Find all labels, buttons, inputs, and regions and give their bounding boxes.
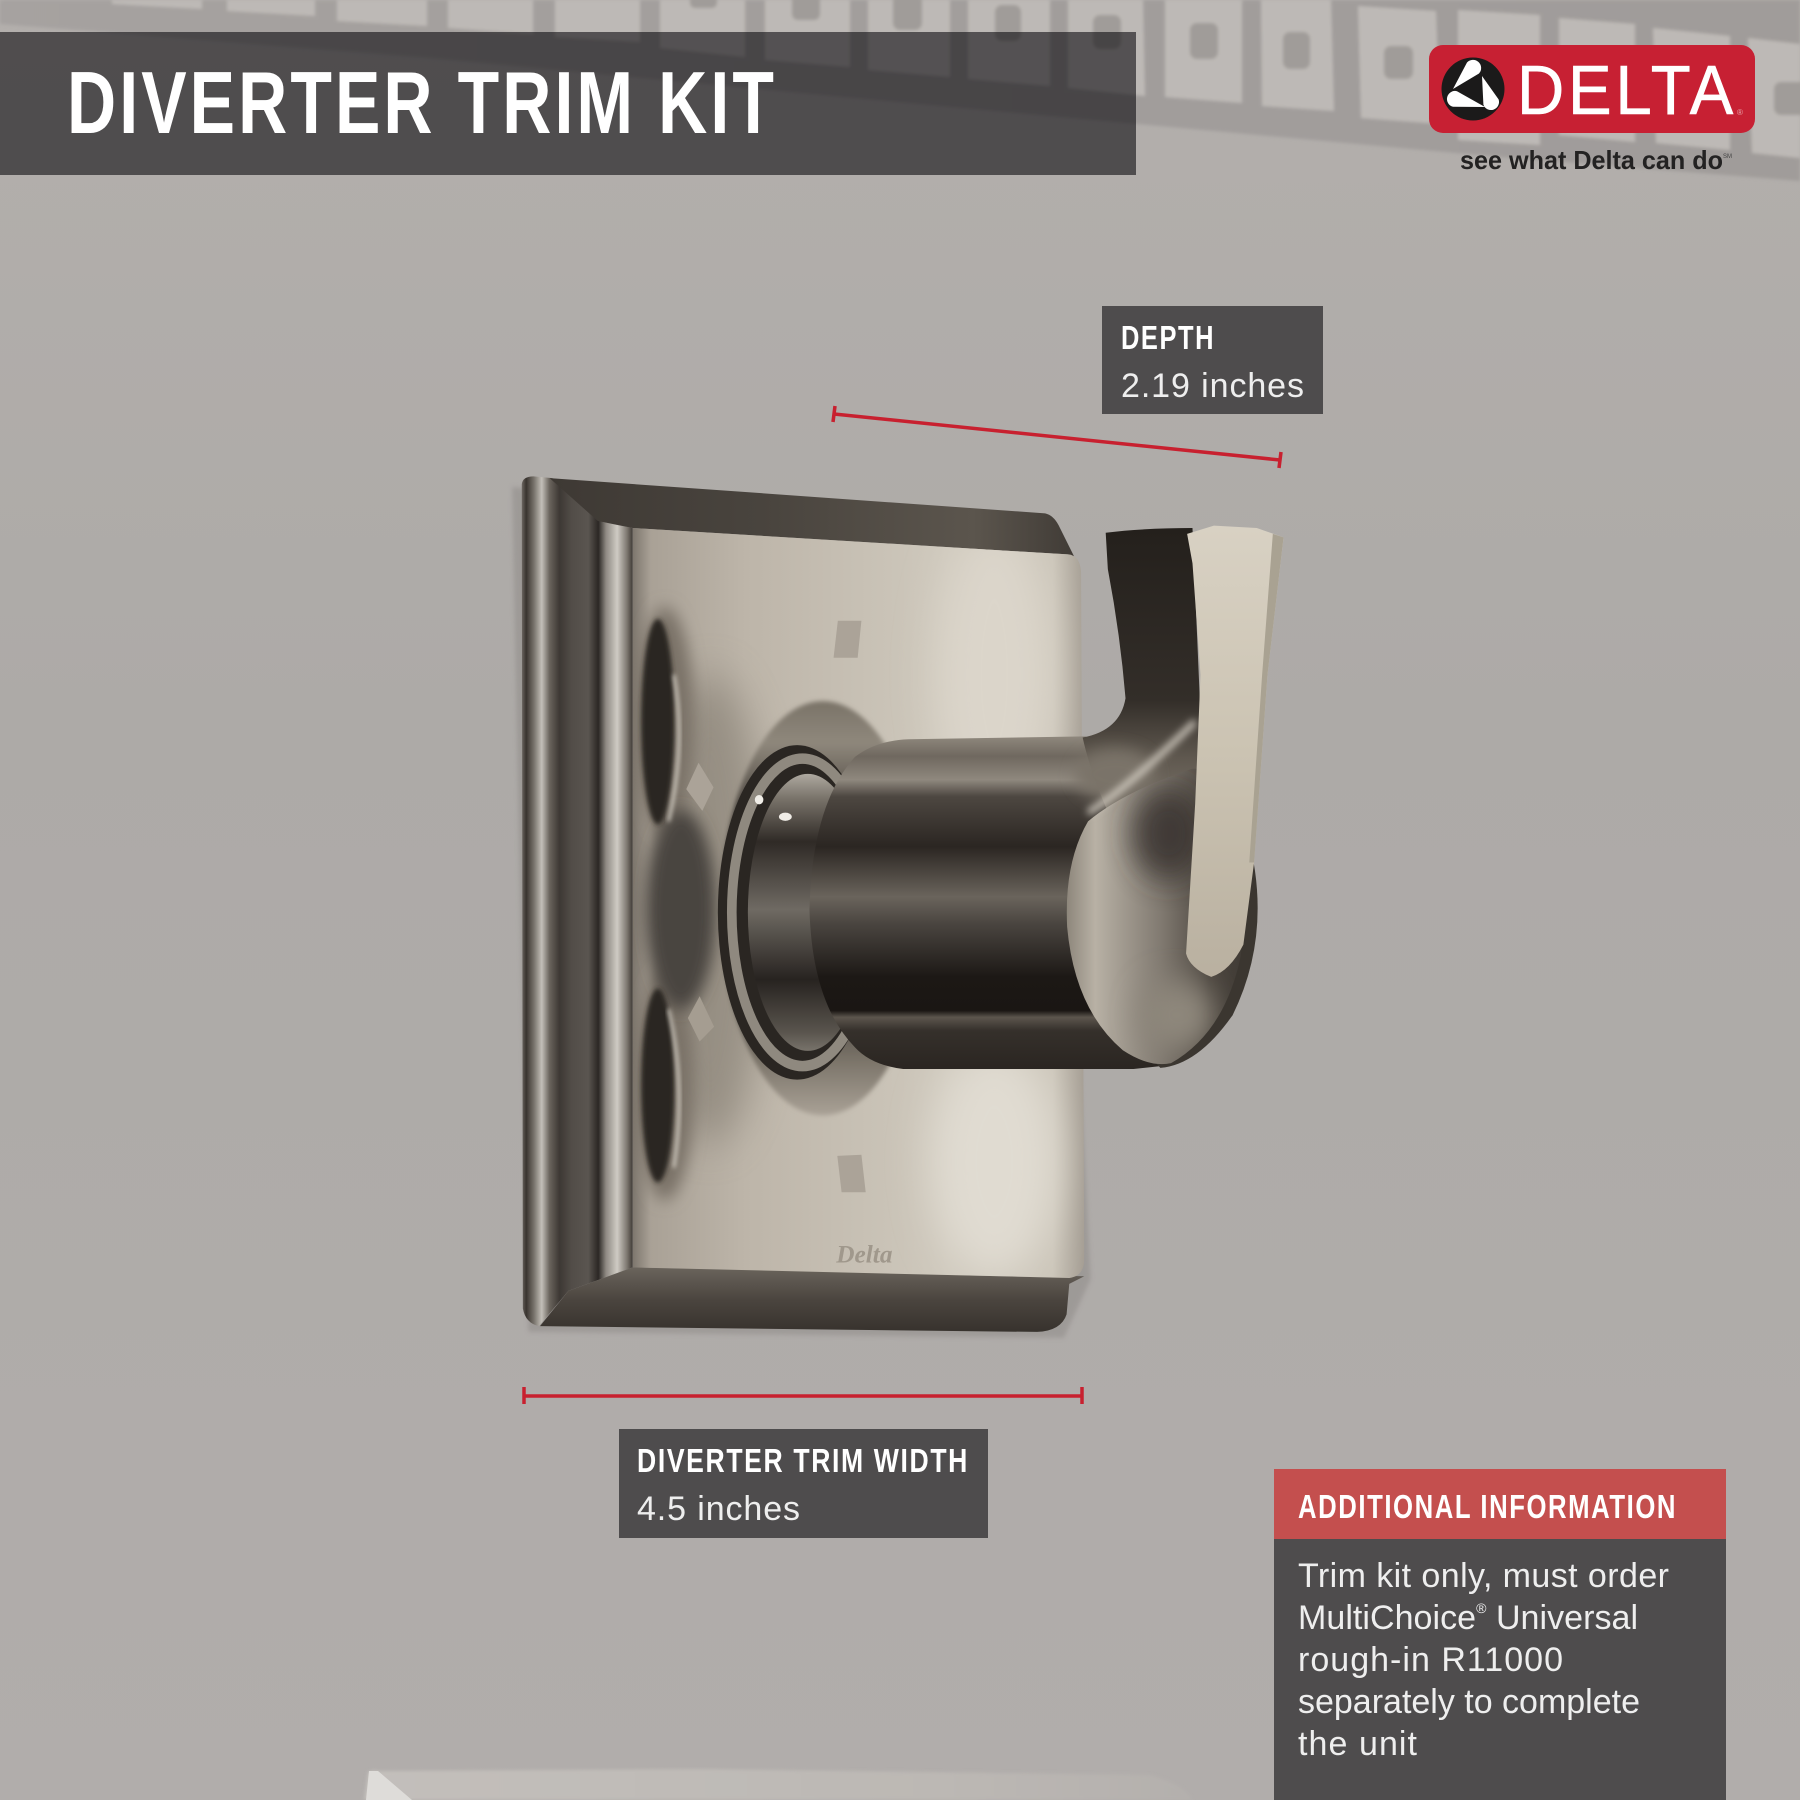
panel body text: ® [1476, 1600, 1487, 1616]
face marker upper left [686, 763, 714, 811]
panel body [1274, 1539, 1726, 1800]
lever right edge [1249, 534, 1284, 862]
logo emblem [1442, 58, 1504, 120]
lever highlight ridge [1088, 722, 1195, 813]
panel body text: rough-in R11000 [1298, 1641, 1563, 1679]
panel body text: Universal [1486, 1599, 1638, 1637]
face marker lower left [688, 996, 714, 1041]
width label [619, 1429, 988, 1538]
handle barrel [809, 736, 1171, 1069]
handle rear sliver [1123, 851, 1258, 1068]
depth dimension line [833, 406, 1281, 468]
flange [721, 701, 925, 1115]
logo wordmark: DELTA [1517, 51, 1737, 129]
Delta logo [1429, 45, 1755, 175]
wall shadow [512, 487, 1091, 1338]
panel body text: separately to complete [1298, 1683, 1640, 1721]
background tile band [0, 0, 1800, 181]
panel body text [1298, 1557, 1669, 1763]
partial fixture at bottom edge [364, 1769, 1192, 1800]
logo badge [1429, 45, 1755, 133]
panel body text: Trim kit only, must order [1298, 1557, 1669, 1595]
depth label box [1102, 306, 1323, 414]
bar background [0, 32, 1136, 175]
saddle blend [1075, 748, 1155, 801]
depth label [1102, 306, 1323, 414]
title bar [0, 32, 1136, 175]
width heading: DIVERTER TRIM WIDTH [637, 1442, 969, 1479]
title: DIVERTER TRIM KIT [67, 53, 777, 152]
ring highlights [755, 795, 792, 821]
trim plate [522, 476, 1088, 1332]
registered mark: ® [1737, 108, 1743, 117]
top bevel [550, 478, 1080, 572]
plate face [633, 522, 1088, 1279]
tagline: see what Delta can do [1460, 145, 1723, 175]
panel body text: the unit [1298, 1725, 1418, 1763]
width dimension line [524, 1387, 1082, 1404]
panel body text: MultiChoice [1298, 1599, 1476, 1637]
embossed Delta logo: Delta [835, 1241, 892, 1269]
neck ring [718, 745, 876, 1080]
lever bright face [1186, 526, 1284, 977]
face marker bottom [837, 1155, 866, 1192]
handle end cap [1066, 769, 1235, 1064]
service mark: SM [1723, 154, 1732, 160]
depth value: 2.19 inches [1121, 367, 1304, 405]
width label box [619, 1429, 988, 1538]
panel header [1274, 1469, 1726, 1539]
depth heading: DEPTH [1121, 319, 1215, 356]
fixture highlight [366, 1771, 412, 1800]
width value: 4.5 inches [637, 1490, 800, 1528]
left bevel [522, 476, 633, 1326]
bottom bevel [540, 1267, 1084, 1332]
panel heading: ADDITIONAL INFORMATION [1298, 1488, 1677, 1525]
lever back [1083, 528, 1201, 821]
faucet trim product [512, 476, 1284, 1338]
additional information panel [1274, 1469, 1726, 1800]
face marker top [834, 621, 861, 658]
